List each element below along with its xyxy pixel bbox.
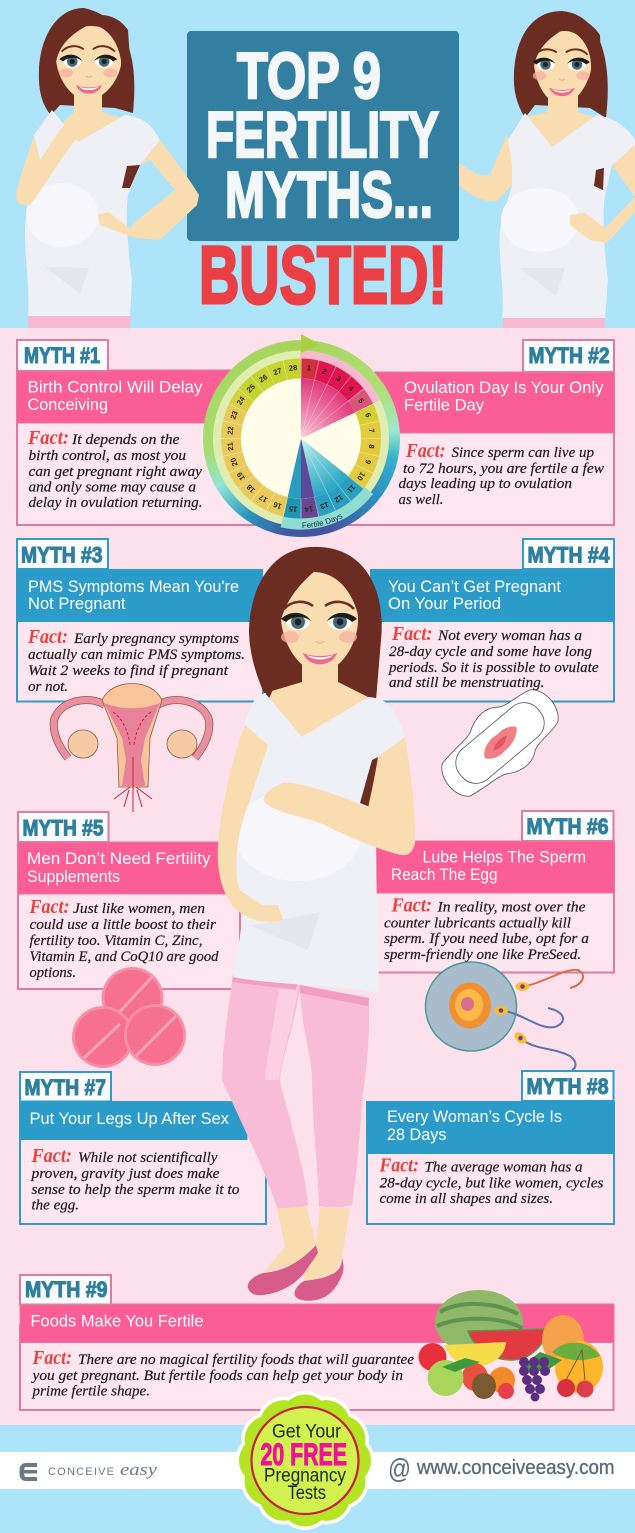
myth 2 fact: as well.	[398, 492, 444, 508]
myth 4 title	[388, 578, 561, 613]
day numbers: 6	[363, 412, 373, 419]
day ring	[231, 368, 371, 508]
myth 8 fact: 28-day cycle, but like women, cycles	[380, 1176, 604, 1192]
day numbers: 1	[306, 363, 312, 373]
title text: TOP 9	[237, 39, 381, 112]
day numbers: 9	[363, 458, 373, 465]
panel: myth 1	[16, 340, 307, 525]
myth 8 fact	[379, 1154, 604, 1207]
badge: 20 free pregnancy tests: Get Your	[272, 1422, 342, 1442]
myth 7 fact: proven, gravity just does make	[30, 1166, 220, 1182]
myth 8 title: 28 Days	[387, 1126, 446, 1144]
website address: @	[388, 1453, 411, 1484]
myth 6 fact: counter lubricants actually kill	[384, 916, 571, 932]
myth 4 fact: 28-day cycle and some have long	[389, 644, 593, 660]
panel: myth 4	[370, 539, 615, 702]
myth 7 fact: Fact:	[31, 1145, 72, 1167]
myth 7 fact	[30, 1145, 240, 1214]
myth 6 fact: sperm-friendly one like PreSeed.	[384, 947, 581, 963]
logo: conceive easy	[20, 1460, 158, 1481]
day numbers: 27	[272, 366, 283, 377]
title text: FERTILITY	[206, 98, 439, 171]
day numbers	[226, 363, 376, 514]
day numbers: 16	[272, 500, 283, 511]
myth 5 fact: Just like women, men	[73, 901, 205, 917]
myth 9 title: Foods Make You Fertile	[30, 1312, 204, 1330]
day numbers: 17	[257, 493, 269, 505]
myth 5 title	[27, 850, 211, 886]
pink period wedge	[301, 378, 355, 438]
day numbers: 23	[228, 410, 240, 420]
myth 1 fact: It depends on the	[71, 432, 180, 448]
myth 1 fact: can get pregnant right away	[28, 464, 202, 480]
myth 2 fact	[398, 440, 604, 508]
panel: myth 9	[20, 1275, 614, 1410]
myth 6 title: Reach The Egg	[391, 866, 498, 884]
myth 9 fact: There are no magical fertility foods that will guarantee	[78, 1352, 414, 1368]
myth 7 fact: the egg.	[32, 1198, 79, 1214]
myth 3 fact	[27, 626, 245, 695]
chart: fertility cycle wheel	[203, 334, 400, 537]
myth 3 fact: Early pregnancy symptoms	[73, 631, 239, 647]
footer background	[0, 1425, 635, 1533]
icon: red arrows	[114, 757, 152, 812]
myth 4 title: You Can’t Get Pregnant	[388, 578, 561, 596]
myth 3 title: PMS Symptoms Mean You're	[28, 578, 239, 596]
cherries	[557, 1350, 594, 1398]
day numbers: 14	[303, 504, 314, 514]
illustration: presenting pregnant woman	[459, 11, 635, 328]
myth 1 fact: and only some may cause a	[28, 480, 196, 496]
panel: myth 5	[18, 812, 240, 989]
day numbers: 7	[367, 428, 376, 433]
main pink background	[0, 328, 635, 1425]
title text: MYTHS...	[225, 158, 433, 231]
myth 1 tag: MYTH #1	[24, 343, 100, 368]
myth 3 fact: or not.	[28, 679, 68, 695]
badge: 20 free pregnancy tests: 20 FREE	[260, 1436, 347, 1472]
day numbers: 2	[321, 367, 328, 376]
myth 4 fact	[388, 623, 599, 691]
day numbers: 10	[355, 470, 367, 482]
myth 9 fact: you get pregnant. But fertile foods can help get your body in	[30, 1368, 403, 1384]
website address: www.conceiveeasy.com	[416, 1457, 614, 1479]
myth 5 fact: could use a little boost to their	[30, 917, 216, 933]
myth 4 fact: periods. So it is possible to ovulate	[388, 660, 599, 676]
title text	[206, 39, 439, 231]
myth 9 tag: MYTH #9	[25, 1277, 108, 1302]
myth 9 fact: Fact:	[32, 1347, 72, 1369]
icon: uterus	[54, 684, 209, 812]
myth 8 fact: Fact:	[379, 1154, 419, 1176]
day numbers: 22	[226, 426, 235, 435]
myth 4 fact: Not every woman has a	[437, 628, 582, 644]
myth 2 fact: Since sperm can live up	[452, 445, 594, 461]
grapes	[519, 1357, 550, 1402]
myth 1 title: Birth Control Will Delay	[28, 378, 203, 396]
myth 3 fact: Fact:	[27, 626, 68, 648]
panel: myth 7	[19, 1072, 266, 1224]
myth 6 tag: MYTH #6	[526, 814, 608, 839]
myth 8 fact: come in all shapes and sizes.	[380, 1191, 553, 1207]
myth 4 fact: and still be menstruating.	[389, 675, 544, 691]
myth 5 fact: Fact:	[29, 896, 69, 918]
header background	[0, 0, 635, 328]
day numbers: 19	[235, 470, 247, 482]
day numbers: 20	[228, 457, 240, 467]
day numbers: 21	[226, 442, 235, 451]
day numbers: 13	[319, 500, 330, 511]
myth 2 fact: to 72 hours, you are fertile a few	[403, 461, 604, 477]
myth 9 fact	[30, 1347, 414, 1400]
myth 4 fact: Fact:	[391, 623, 432, 645]
myth 1 title: Conceiving	[28, 396, 108, 414]
myth 8 title	[387, 1108, 562, 1144]
arrow head	[301, 334, 320, 353]
myth 3 title: Not Pregnant	[28, 595, 126, 613]
day numbers: 12	[333, 493, 345, 505]
icon: pills	[72, 967, 186, 1068]
myth 1 fact: birth control, as most you	[28, 448, 186, 464]
myth 6 fact: sperm. If you need lube, opt for a	[384, 931, 589, 947]
myth 6 fact: In reality, most over the	[436, 900, 586, 916]
footer white band	[0, 1452, 635, 1489]
myth 2 fact: Fact:	[405, 440, 446, 462]
logo: conceive easy: CONCEIVE	[48, 1466, 114, 1478]
myth 3 title	[28, 578, 239, 613]
heading: busted: BUSTED!	[199, 230, 447, 321]
myth 1 fact: Fact:	[27, 427, 69, 449]
myth 1 tag	[17, 340, 108, 371]
myth 3 tag: MYTH #3	[21, 542, 102, 568]
myth 7 fact: sense to help the sperm make it to	[32, 1182, 240, 1198]
day numbers: 4	[347, 384, 356, 394]
day numbers: 28	[288, 363, 298, 373]
myth 2 tag: MYTH #2	[528, 343, 610, 368]
day numbers: 25	[245, 382, 257, 394]
myth 4 tag: MYTH #4	[528, 542, 610, 568]
myth 7 tag: MYTH #7	[24, 1075, 106, 1100]
myth 2 tag	[523, 340, 614, 372]
myth 6 title: Lube Helps The Sperm	[422, 848, 586, 866]
myth 2 fact: days leading up to ovulation	[398, 476, 572, 492]
icon: egg and sperm	[426, 962, 583, 1070]
myth 5 tag: MYTH #5	[22, 816, 104, 840]
icon: pile of fruits	[418, 1290, 603, 1402]
fertile days label: Fertile Days	[302, 514, 342, 528]
panel: myth 8	[366, 1071, 615, 1224]
day numbers: 24	[235, 394, 247, 407]
website address	[388, 1453, 614, 1484]
myth 5 fact: options.	[30, 965, 76, 981]
badge: 20 free pregnancy tests: Tests	[288, 1483, 326, 1504]
myth 2 title: Ovulation Day Is Your Only	[404, 379, 604, 397]
panel: myth 6	[367, 811, 614, 972]
myth 5 fact: fertility too. Vitamin C, Zinc,	[30, 933, 202, 949]
badge: 20 free pregnancy tests	[231, 1387, 379, 1533]
day numbers: 18	[245, 483, 257, 495]
myth 6 fact: Fact:	[391, 894, 432, 916]
myth 1 title	[28, 378, 203, 414]
illustration: thinking pregnant woman	[16, 8, 199, 328]
myth 8 fact: The average woman has a	[424, 1160, 582, 1176]
myth 3 fact: actually can mimic PMS symptoms.	[28, 647, 245, 663]
myth 5 title: Supplements	[27, 868, 120, 886]
myth 9 fact: prime fertile shape.	[31, 1384, 150, 1400]
myth 6 fact	[384, 894, 589, 963]
myth 8 tag: MYTH #8	[526, 1074, 608, 1099]
myth 3 fact: Wait 2 weeks to find if pregnant	[28, 663, 229, 679]
logo: conceive easy: easy	[120, 1460, 158, 1479]
fertile days wedge	[288, 438, 348, 498]
myth 5 fact: Vitamin E, and CoQ10 are good	[30, 949, 219, 965]
myth 1 fact	[27, 427, 202, 511]
myth 7 fact: While not scientifically	[78, 1150, 218, 1166]
icon: sanitary pad	[427, 674, 573, 812]
myth 5 fact	[29, 896, 219, 981]
myth 8 title: Every Woman’s Cycle Is	[387, 1108, 562, 1126]
day numbers: 8	[367, 444, 376, 449]
panel: myth 3	[16, 539, 263, 702]
title box	[187, 31, 459, 241]
day numbers: 11	[345, 483, 357, 495]
myth 4 title: On Your Period	[388, 595, 501, 613]
badge: 20 free pregnancy tests: Pregnancy	[264, 1466, 346, 1486]
day numbers: 15	[288, 504, 298, 514]
day numbers: 5	[356, 397, 366, 405]
myth 1 fact: delay in ovulation returning.	[28, 495, 202, 511]
myth 2 title: Fertile Day	[404, 396, 485, 414]
day numbers: 3	[335, 373, 343, 383]
myth 6 title	[391, 848, 586, 884]
myth 7 title: Put Your Legs Up After Sex	[30, 1110, 230, 1128]
illustration: central pregnant woman	[218, 547, 415, 1301]
myth 2 title	[404, 379, 604, 414]
panel: myth 2	[301, 340, 614, 525]
myth 5 title: Men Don’t Need Fertility	[27, 850, 211, 868]
day numbers: 26	[257, 372, 269, 384]
